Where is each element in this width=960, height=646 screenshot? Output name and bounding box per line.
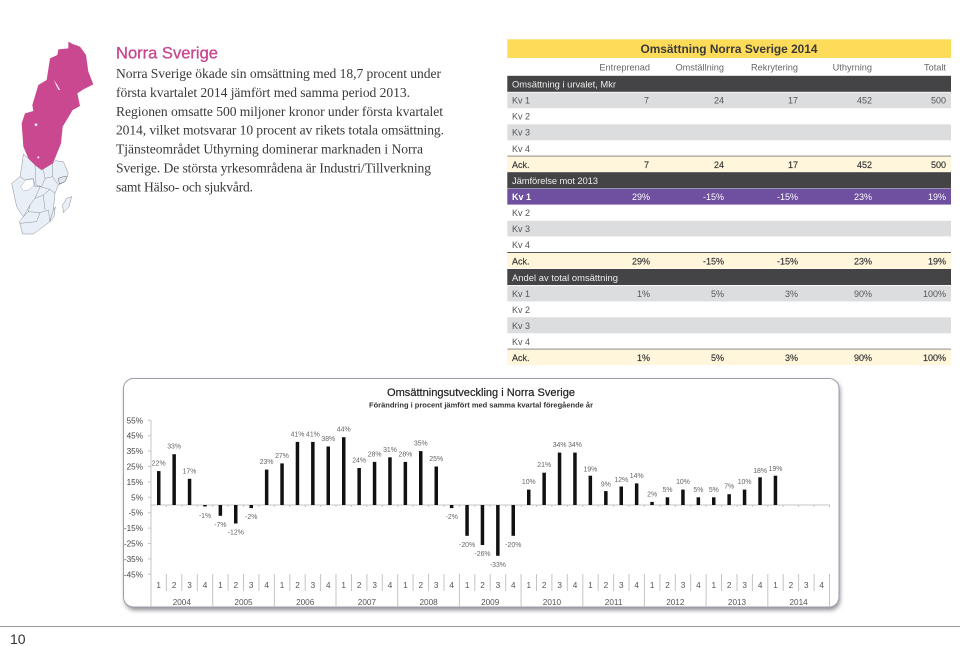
year labels: 2011	[605, 598, 623, 607]
section: Andel av total omsättning: 3%	[785, 289, 798, 299]
section: Jämförelse mot 2013: -15%	[703, 256, 724, 266]
quarter labels: 4	[573, 581, 578, 590]
body text block: samt Hälso- och sjukvård.	[116, 179, 253, 194]
section: Omsättning i urvalet: 452	[857, 96, 872, 106]
section: Jämförelse mot 2013: -15%	[703, 192, 724, 202]
footer rule	[0, 626, 960, 627]
panel: chart Omsättningsutveckling	[124, 378, 840, 610]
quarter labels: 1	[465, 581, 470, 590]
category axis separators	[151, 574, 830, 607]
data labels: 5%	[709, 487, 719, 494]
panel frame	[124, 378, 840, 610]
section: Jämförelse mot 2013: -15%	[777, 256, 798, 266]
quarter labels: 2	[357, 581, 362, 590]
data labels: -20%	[505, 542, 521, 549]
data labels: 28%	[368, 451, 381, 458]
quarter labels: 3	[681, 581, 686, 590]
data labels: 12%	[614, 477, 628, 484]
quarter labels: 1	[773, 581, 778, 590]
quarter labels: 4	[634, 581, 639, 590]
quarter labels: 3	[557, 581, 562, 590]
quarter labels: 2	[789, 581, 794, 590]
body text block: Regionen omsatte 500 miljoner kronor under första kvartalet	[116, 104, 443, 119]
y axis: 45%	[127, 432, 143, 441]
section: Andel av total omsättning: 1%	[637, 289, 650, 299]
section: Andel av total omsättning: Kv 1	[512, 289, 530, 299]
section: Omsättning i urvalet: Kv 3	[512, 128, 530, 138]
year labels: 2008	[419, 598, 438, 607]
data labels: 34%	[568, 442, 582, 449]
zero axis line	[151, 505, 830, 507]
section: Andel av total omsättning: Kv 4	[512, 337, 530, 347]
data labels: 33%	[167, 444, 181, 451]
quarter labels: 2	[419, 581, 424, 590]
table title bar	[507, 39, 951, 58]
data labels: 23%	[260, 459, 273, 466]
data labels: 9%	[601, 482, 611, 489]
quarter labels: 4	[203, 581, 208, 590]
column headers: Totalt	[924, 62, 946, 72]
section: Andel av total omsättning: 5%	[711, 289, 724, 299]
section: Andel av total omsättning: 3%	[785, 353, 798, 363]
section: Omsättning i urvalet: 24	[714, 160, 724, 170]
data labels: 10%	[522, 479, 536, 486]
section: Omsättning i urvalet: 500	[931, 160, 946, 170]
data labels: 10%	[738, 479, 751, 486]
y axis: 5%	[131, 493, 143, 502]
data labels: 2%	[647, 491, 657, 498]
section: Jämförelse mot 2013: Jämförelse mot 2013	[512, 175, 598, 186]
data labels: -26%	[474, 551, 491, 558]
y axis: -45%	[124, 570, 143, 579]
map of Sweden	[12, 42, 93, 234]
Norra Sverige region	[22, 42, 93, 170]
quarter labels: 1	[712, 581, 717, 590]
year labels: 2012	[666, 598, 685, 607]
year labels	[173, 598, 808, 607]
quarter labels: 2	[727, 581, 732, 590]
quarter labels: 2	[295, 581, 300, 590]
quarter labels: 4	[326, 581, 331, 590]
section: Omsättning i urvalet: 17	[788, 160, 798, 170]
section: Jämförelse mot 2013: 29%	[632, 192, 650, 202]
column headers: Omställning	[675, 62, 724, 72]
section: Andel av total omsättning: 90%	[854, 289, 872, 299]
quarter labels: 4	[758, 581, 763, 590]
quarter labels: 1	[588, 581, 593, 590]
quarter labels: 4	[449, 581, 454, 590]
y axis: 55%	[127, 416, 143, 425]
quarter labels	[156, 581, 824, 590]
body text block: Sverige. De största yrkesområdena är Industri/Tillverkning	[116, 160, 431, 176]
section: Omsättning i urvalet: 7	[644, 96, 649, 106]
data labels: 34%	[553, 442, 566, 449]
data labels	[152, 427, 782, 569]
y axis: 25%	[127, 462, 143, 472]
quarter labels: 1	[527, 581, 532, 590]
y axis: 15%	[127, 478, 143, 487]
section: Jämförelse mot 2013	[507, 172, 951, 269]
section: Jämförelse mot 2013: 29%	[632, 256, 650, 266]
section: Omsättning i urvalet: Kv 4	[512, 144, 530, 154]
data labels: 31%	[383, 447, 397, 454]
year labels: 2009	[481, 598, 500, 607]
column headers: Uthyrning	[833, 62, 872, 72]
section: Omsättning i urvalet: Omsättning i urvalet, Mkr	[512, 78, 616, 90]
quarter labels: 4	[264, 581, 269, 590]
year labels: 2010	[543, 598, 561, 607]
section: Omsättning i urvalet	[507, 76, 951, 172]
data labels: 21%	[537, 462, 551, 469]
section: Jämförelse mot 2013: Kv 4	[512, 240, 530, 250]
data labels: 10%	[676, 479, 690, 486]
section: Andel av total omsättning: 1%	[637, 353, 650, 363]
column headers: Rekrytering	[751, 62, 798, 72]
quarter labels: 2	[604, 581, 609, 590]
data labels: 5%	[693, 487, 703, 494]
data labels: 24%	[352, 458, 366, 464]
quarter labels: 3	[249, 581, 254, 590]
section: Andel av total omsättning: 5%	[711, 353, 724, 363]
quarter labels: 3	[619, 581, 624, 590]
year labels: 2013	[728, 598, 747, 607]
quarter labels: 4	[388, 581, 393, 590]
section: Jämförelse mot 2013: 23%	[854, 192, 872, 202]
section: Omsättning i urvalet: 7	[644, 160, 649, 170]
section: Omsättning i urvalet: Ack.	[512, 160, 530, 170]
section: Omsättning i urvalet: Kv 2	[512, 112, 530, 122]
section: Andel av total omsättning: Kv 3	[512, 321, 530, 331]
chart subtitle: Förändring i procent jämfört med samma kvartal föregående år	[369, 400, 593, 410]
data labels: 41%	[291, 431, 304, 438]
year labels: 2004	[173, 598, 191, 607]
data labels: 22%	[152, 461, 166, 468]
data labels: 44%	[337, 427, 351, 434]
quarter labels: 3	[187, 581, 192, 590]
y axis: -15%	[124, 524, 143, 533]
data labels: 28%	[399, 451, 412, 458]
year labels: 2014	[789, 598, 808, 607]
data labels: 41%	[306, 431, 320, 438]
section: Andel av total omsättning: Ack.	[512, 353, 530, 363]
data labels: 27%	[275, 453, 289, 460]
quarter labels: 3	[311, 581, 316, 590]
data labels: 25%	[429, 456, 443, 463]
data labels: -7%	[214, 522, 227, 529]
y axis: -25%	[124, 540, 143, 548]
data labels: 35%	[414, 441, 428, 448]
quarter labels: 1	[650, 581, 655, 590]
section: Omsättning i urvalet: Kv 1	[512, 96, 530, 106]
data labels: 19%	[584, 467, 597, 474]
southern counties	[12, 154, 72, 234]
quarter labels: 4	[819, 581, 824, 590]
body text block: Tjänsteområdet Uthyrning dominerar marknaden i Norra	[116, 142, 423, 157]
section: Jämförelse mot 2013: Kv 3	[512, 224, 530, 234]
bars	[157, 437, 777, 556]
year labels: 2007	[358, 598, 376, 607]
section: Jämförelse mot 2013: -15%	[777, 192, 798, 202]
section: Omsättning i urvalet: 24	[714, 96, 724, 106]
y axis: -35%	[124, 555, 143, 564]
quarter labels: 3	[496, 581, 501, 590]
data labels: 38%	[321, 436, 335, 443]
section: Andel av total omsättning: 100%	[923, 289, 946, 299]
section: Omsättning i urvalet: 452	[857, 160, 872, 170]
table: Omsättning Norra Sverige 2014	[507, 39, 951, 365]
quarter labels: 1	[218, 581, 223, 590]
data labels: -33%	[490, 562, 506, 569]
data labels: 18%	[753, 468, 767, 475]
section: Jämförelse mot 2013: 23%	[854, 256, 872, 266]
data labels: 19%	[769, 466, 782, 473]
column headers	[599, 62, 946, 72]
data labels: 14%	[630, 473, 644, 480]
data labels: 17%	[183, 468, 196, 475]
quarter labels: 1	[403, 581, 408, 590]
quarter labels: 3	[372, 581, 377, 590]
chart title: Omsättningsutveckling i Norra Sverige	[387, 387, 575, 399]
lakes	[35, 80, 60, 158]
y axis	[124, 416, 151, 579]
quarter labels: 3	[434, 581, 439, 590]
quarter labels: 3	[742, 581, 747, 590]
section: Omsättning i urvalet: 17	[788, 96, 798, 106]
y axis: 35%	[127, 447, 143, 456]
quarter labels: 2	[172, 581, 177, 590]
y axis: -5%	[128, 509, 143, 518]
data labels: -12%	[228, 530, 244, 536]
section: Andel av total omsättning: Kv 2	[512, 305, 530, 315]
quarter labels: 2	[665, 581, 670, 590]
quarter labels: 4	[696, 581, 701, 590]
section: Jämförelse mot 2013: 19%	[928, 192, 946, 202]
section: Jämförelse mot 2013: Ack.	[512, 256, 530, 266]
body text block: Norra Sverige ökade sin omsättning med 18,7 procent under	[116, 66, 441, 81]
section: Andel av total omsättning	[507, 269, 951, 365]
section: Andel av total omsättning: Andel av total omsättning	[512, 272, 618, 283]
column headers: Entreprenad	[599, 62, 650, 72]
body text block: första kvartalet 2014 jämfört med samma period 2013.	[116, 85, 410, 100]
data labels: -1%	[199, 513, 211, 520]
year labels: 2006	[296, 598, 315, 607]
table title bar: Omsättning Norra Sverige 2014	[640, 42, 818, 56]
quarter labels: 1	[341, 581, 346, 590]
quarter labels: 2	[542, 581, 547, 590]
quarter labels: 2	[234, 581, 239, 590]
data labels: 7%	[724, 484, 734, 491]
quarter labels: 1	[280, 581, 285, 590]
section: Jämförelse mot 2013: Kv 1	[512, 192, 531, 202]
data labels: 5%	[663, 487, 672, 494]
body text block: 2014, vilket motsvarar 10 procent av rikets totala omsättning.	[116, 123, 444, 138]
section: Andel av total omsättning: 90%	[854, 353, 872, 363]
quarter labels: 2	[480, 581, 485, 590]
heading: Norra Sverige: Norra Sverige	[116, 44, 218, 62]
data labels: -2%	[446, 514, 458, 521]
data labels: -20%	[459, 542, 475, 549]
year labels: 2005	[234, 598, 253, 607]
data labels: -2%	[245, 514, 257, 521]
section: Jämförelse mot 2013: 19%	[928, 256, 946, 266]
section: Andel av total omsättning: 100%	[923, 353, 946, 363]
body text block	[116, 66, 444, 194]
quarter labels: 3	[804, 581, 809, 590]
quarter labels: 4	[511, 581, 516, 590]
section: Omsättning i urvalet: 500	[931, 96, 946, 106]
section: Jämförelse mot 2013: Kv 2	[512, 208, 530, 218]
quarter labels: 1	[156, 581, 161, 590]
